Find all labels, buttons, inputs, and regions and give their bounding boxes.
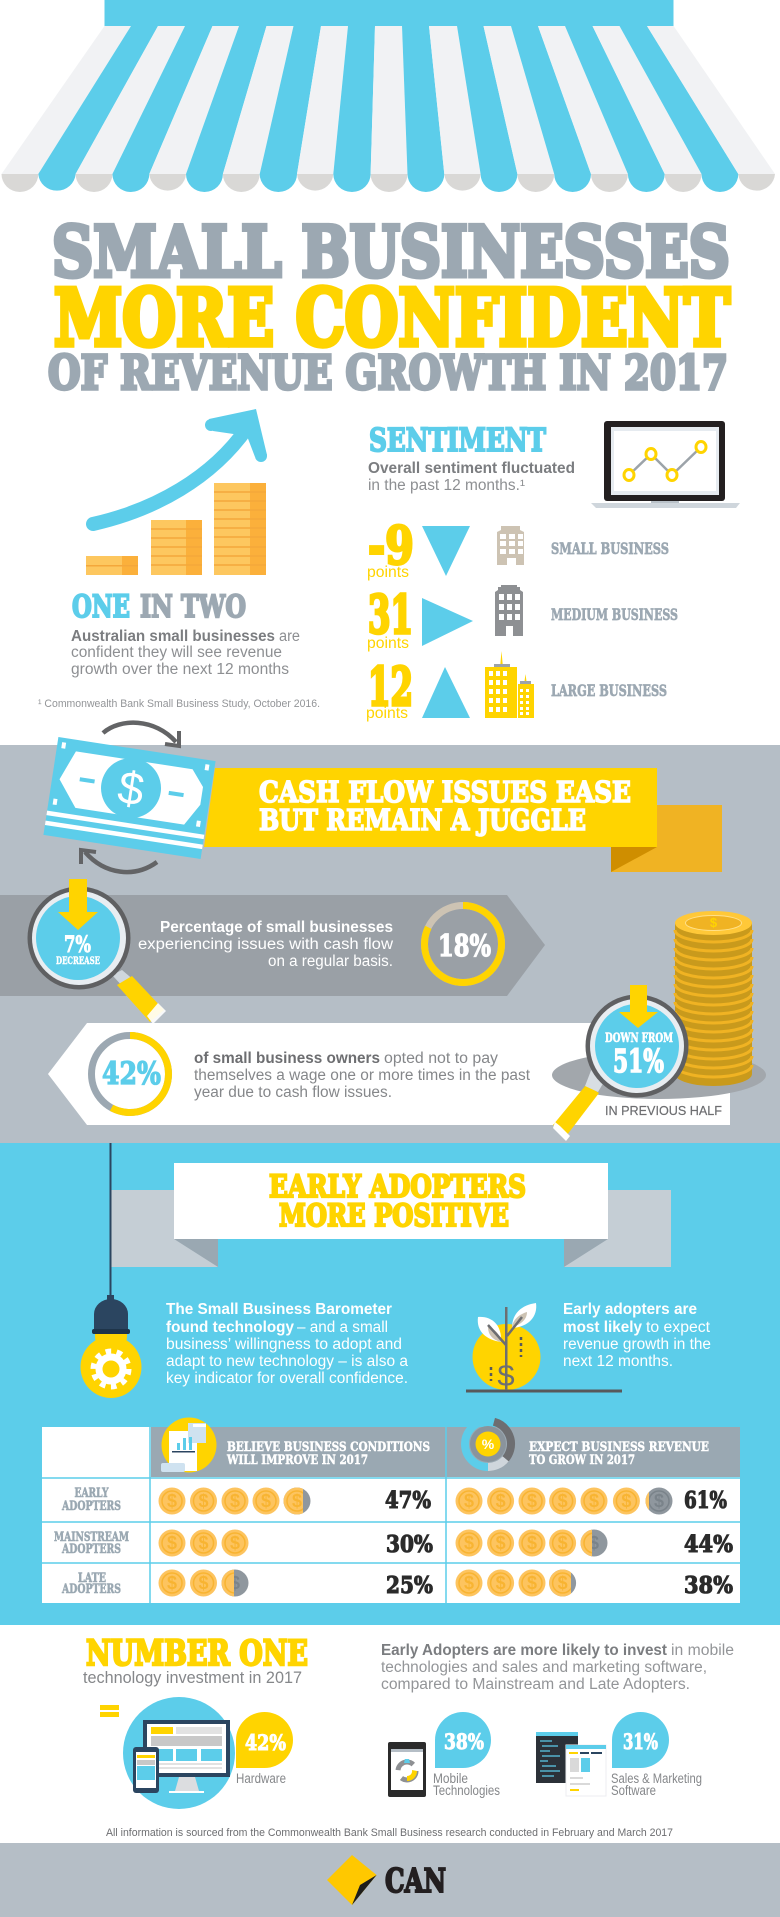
text: barometer description: business’ willingness to adopt and [166, 1336, 402, 1353]
icon: light bulb with gear [80, 1143, 142, 1398]
coins: late conditions: $ [230, 1573, 240, 1593]
coins: mainstream revenue: $ [558, 1533, 568, 1553]
row labels: EARLY [74, 1486, 109, 1501]
banner heading text: CASH FLOW ISSUES EASE [259, 775, 631, 809]
icon: large buildings [485, 651, 534, 718]
text: early adopters likely: most likely [563, 1319, 642, 1336]
dollar note: $ [114, 760, 148, 816]
text: one in two description [71, 628, 300, 678]
heading text: MORE POSITIVE [279, 1198, 509, 1234]
heading: one in two: ONE [72, 589, 130, 625]
heading text [269, 1169, 526, 1234]
coins: late conditions [158, 1570, 248, 1596]
row labels: ADOPTERS [61, 1542, 121, 1557]
coins: early adopters revenue: $ [496, 1491, 506, 1511]
cycling arrow top [103, 723, 179, 746]
heading: one in two [72, 589, 246, 625]
title [48, 212, 730, 401]
text: barometer description: found technology [166, 1319, 294, 1336]
coins: early adopters revenue [456, 1488, 672, 1514]
coins: early adopters conditions: $ [292, 1491, 302, 1511]
points label: points [367, 635, 409, 652]
coins: mainstream revenue: $ [589, 1533, 599, 1553]
icon: percentage donut [456, 1412, 520, 1476]
down triangle [422, 526, 470, 576]
coins: early adopters revenue: $ [527, 1491, 537, 1511]
sentiment row: large business [366, 651, 667, 722]
text: early adopters invest [381, 1642, 734, 1693]
band: owners not paying wage [48, 1023, 730, 1125]
banner: cash flow heading [204, 768, 722, 872]
icon: stack of coins [552, 911, 766, 1099]
text: one in two description: confident they will see revenue [71, 644, 282, 661]
coins: early adopters conditions: $ [230, 1491, 240, 1511]
coins: mainstream revenue: $ [527, 1533, 537, 1553]
coins: late revenue: $ [464, 1573, 474, 1593]
heading text: EARLY ADOPTERS [269, 1169, 526, 1205]
coins: early adopters revenue: $ [654, 1491, 664, 1511]
text block [194, 1050, 531, 1101]
row labels: ADOPTERS [61, 1582, 121, 1597]
coins: early adopters revenue: $ [621, 1491, 631, 1511]
coins: late conditions: $ [198, 1573, 209, 1593]
callout: 31% sales and marketing software: Software [611, 1783, 656, 1798]
number: 31 [368, 585, 413, 646]
callout: 38% mobile technologies: Technologies [433, 1783, 500, 1798]
magnifier: 7% decrease: DECREASE [56, 956, 100, 967]
text: barometer description: key indicator for overall confidence. [166, 1370, 408, 1387]
logo: CAN: CAN [385, 1861, 446, 1900]
icon: stack of coins: $ [710, 915, 718, 930]
percentages: 44% [684, 1531, 733, 1558]
coins: early adopters conditions: $ [198, 1491, 209, 1511]
coins: mainstream conditions: $ [167, 1533, 177, 1553]
text: barometer description: adapt to new technology – is also a [166, 1353, 408, 1370]
label: LARGE BUSINESS [551, 681, 667, 700]
coins: mainstream conditions [158, 1530, 248, 1556]
text: one in two description: are [279, 628, 300, 645]
donut: 18%: 18% [438, 929, 491, 964]
text block: year due to cash flow issues. [194, 1084, 392, 1101]
icon: laptop with line chart [591, 421, 740, 508]
number: -9 [368, 516, 414, 577]
heading: number one: NUMBER ONE [86, 1634, 308, 1674]
icon: growth arrow and coin stacks [86, 409, 267, 575]
icon: mobile phone with gear [388, 1742, 426, 1797]
label: in previous half: IN PREVIOUS HALF [605, 1103, 722, 1118]
percentages: 38% [684, 1572, 733, 1599]
coins: early adopters conditions: $ [261, 1491, 271, 1511]
down arrow [58, 879, 98, 930]
text: barometer description [166, 1301, 408, 1387]
donut: 42%: 42% [102, 1056, 161, 1092]
text: one in two description: growth over the next 12 months [71, 661, 289, 678]
icon: small building [497, 526, 524, 565]
percentages [385, 1487, 733, 1599]
magnifier: down from 51% [553, 985, 688, 1141]
text: early adopters invest: in mobile [671, 1642, 734, 1659]
header: believe business conditions: WILL IMPROVE IN 2017 [226, 1453, 368, 1468]
ribbon body [174, 1163, 608, 1239]
magnifier: down from 51%: DOWN FROM [605, 1031, 673, 1046]
banner heading text [259, 775, 631, 837]
footer panel [0, 1843, 780, 1917]
handle [112, 970, 166, 1024]
text: sentiment description: in the past 12 months.¹ [368, 477, 525, 494]
coins: mainstream revenue [456, 1530, 608, 1556]
header: believe business conditions: BELIEVE BUSINESS CONDITIONS [227, 1440, 430, 1455]
points label: points [366, 705, 408, 722]
donut: 18% [424, 906, 502, 982]
text: barometer description: – and a small [297, 1319, 388, 1336]
percentages: 61% [684, 1487, 727, 1514]
callout: 42% hardware [236, 1712, 293, 1786]
row labels [54, 1486, 129, 1597]
donut: 42% [92, 1036, 168, 1112]
up triangle [422, 667, 470, 718]
text: one in two description: Australian small businesses [71, 628, 275, 645]
coins: mainstream conditions: $ [230, 1533, 240, 1553]
text: barometer description: The Small Business Barometer [166, 1301, 392, 1318]
text block: of small business owners [194, 1050, 380, 1067]
text: early adopters invest: technologies and sales and marketing software, [381, 1659, 707, 1676]
points label: points [367, 564, 409, 581]
coin stack medium [151, 520, 202, 575]
coins: mainstream conditions: $ [198, 1533, 209, 1553]
coins: mainstream revenue: $ [464, 1533, 474, 1553]
icon: report documents [161, 1418, 216, 1472]
header: expect business revenue: TO GROW IN 2017 [529, 1453, 635, 1468]
percentages: 25% [386, 1572, 433, 1599]
footnote: ¹ Commonwealth Bank Small Business Study, October 2016. [38, 698, 320, 710]
coin stack small [86, 556, 138, 575]
coins: early adopters revenue: $ [464, 1491, 474, 1511]
banner: early adopters heading [111, 1163, 671, 1267]
icon: equals sign [100, 1705, 119, 1717]
text block [138, 919, 394, 970]
banner fold [611, 805, 722, 872]
number: 12 [368, 657, 413, 718]
ribbon tails [111, 1190, 671, 1267]
coins: early adopters revenue: $ [558, 1491, 568, 1511]
right triangle [422, 598, 473, 646]
heading: sentiment: SENTIMENT [369, 421, 546, 459]
percentages: 30% [386, 1531, 433, 1558]
magnifier: 7% decrease [28, 879, 166, 1024]
icon: money plant [466, 1303, 622, 1393]
logo: CAN [327, 1855, 446, 1905]
awning [2, 0, 775, 192]
callout: 38% mobile technologies: 38% [444, 1729, 484, 1754]
icon: code screen and web page [536, 1732, 606, 1796]
text: sentiment description: Overall sentiment fluctuated [368, 460, 575, 477]
text: early adopters invest: compared to Mainstream and Late Adopters. [381, 1676, 690, 1693]
coins: late revenue: $ [527, 1573, 537, 1593]
text: early adopters likely: to expect [646, 1319, 711, 1336]
text: early adopters likely: Early adopters are [563, 1301, 697, 1318]
icon: medium building [495, 585, 523, 636]
text block: Percentage of small businesses [160, 919, 393, 936]
callout: 38% mobile technologies [433, 1712, 500, 1798]
text: early adopters likely [563, 1301, 711, 1370]
panel: early adopters background [0, 1143, 780, 1625]
callout: 38% mobile technologies: Mobile [433, 1771, 468, 1786]
text: early adopters likely: revenue growth in the [563, 1336, 711, 1353]
coins: late revenue: $ [558, 1573, 568, 1593]
heading: one in two: IN TWO [140, 589, 246, 625]
row labels: MAINSTREAM [54, 1530, 129, 1545]
subheading: technology investment: technology investment in 2017 [83, 1668, 302, 1687]
callout: 31% sales and marketing software: 31% [623, 1729, 658, 1754]
coins: late revenue [456, 1570, 576, 1596]
banner body [204, 768, 657, 847]
callout: 42% hardware: Hardware [236, 1771, 286, 1786]
text: sentiment description [368, 460, 575, 494]
dollar note [43, 737, 216, 859]
row labels: LATE [78, 1571, 106, 1586]
magnifier: 7% decrease: 7% [64, 932, 91, 958]
banner heading text: BUT REMAIN A JUGGLE [259, 803, 586, 837]
down arrow [619, 985, 658, 1028]
coins: early adopters conditions [158, 1488, 310, 1514]
text block: on a regular basis. [268, 953, 393, 970]
text block: opted not to pay [384, 1050, 498, 1067]
cycling arrow bottom [81, 850, 157, 872]
panel: cash flow background [0, 745, 780, 1143]
text: early adopters invest: Early Adopters are more likely to invest [381, 1642, 667, 1659]
arrow [93, 409, 267, 524]
header: believe business conditions [226, 1440, 430, 1468]
percentages: 47% [385, 1487, 431, 1514]
magnifier: down from 51%: 51% [613, 1042, 664, 1080]
header: expect business revenue [529, 1440, 709, 1468]
coins: early adopters revenue: $ [589, 1491, 599, 1511]
label: MEDIUM BUSINESS [551, 605, 678, 624]
callout: 31% sales and marketing software [611, 1712, 702, 1798]
source note: All information is sourced from the Commonwealth Bank Small Business research conducted in February and March 2017 [106, 1827, 673, 1839]
coin stack tall [214, 483, 266, 575]
icon: money plant: $ [497, 1358, 515, 1393]
label: SMALL BUSINESS [551, 539, 669, 558]
text block: themselves a wage one or more times in the past [194, 1067, 531, 1084]
icon: dollar note with cycling arrows [43, 723, 216, 872]
text: early adopters likely: next 12 months. [563, 1353, 673, 1370]
handle [553, 1068, 608, 1141]
coins: late conditions: $ [167, 1573, 177, 1593]
row labels: ADOPTERS [61, 1499, 121, 1514]
sentiment row: small business [367, 516, 669, 581]
coins: late revenue: $ [496, 1573, 506, 1593]
coins: mainstream revenue: $ [496, 1533, 506, 1553]
callout: 42% hardware: 42% [245, 1730, 286, 1755]
icon: hardware devices [123, 1697, 235, 1809]
band: percentage of businesses with cash flow issues [0, 895, 545, 996]
table: adoption comparison [42, 1412, 740, 1603]
callout: 31% sales and marketing software: Sales & Marketing [611, 1771, 702, 1786]
icon: percentage donut: % [482, 1436, 495, 1452]
coins: early adopters conditions: $ [167, 1491, 177, 1511]
sentiment row: medium business [367, 585, 678, 652]
text block: experiencing issues with cash flow [138, 936, 394, 953]
header: expect business revenue: EXPECT BUSINESS REVENUE [529, 1440, 709, 1455]
